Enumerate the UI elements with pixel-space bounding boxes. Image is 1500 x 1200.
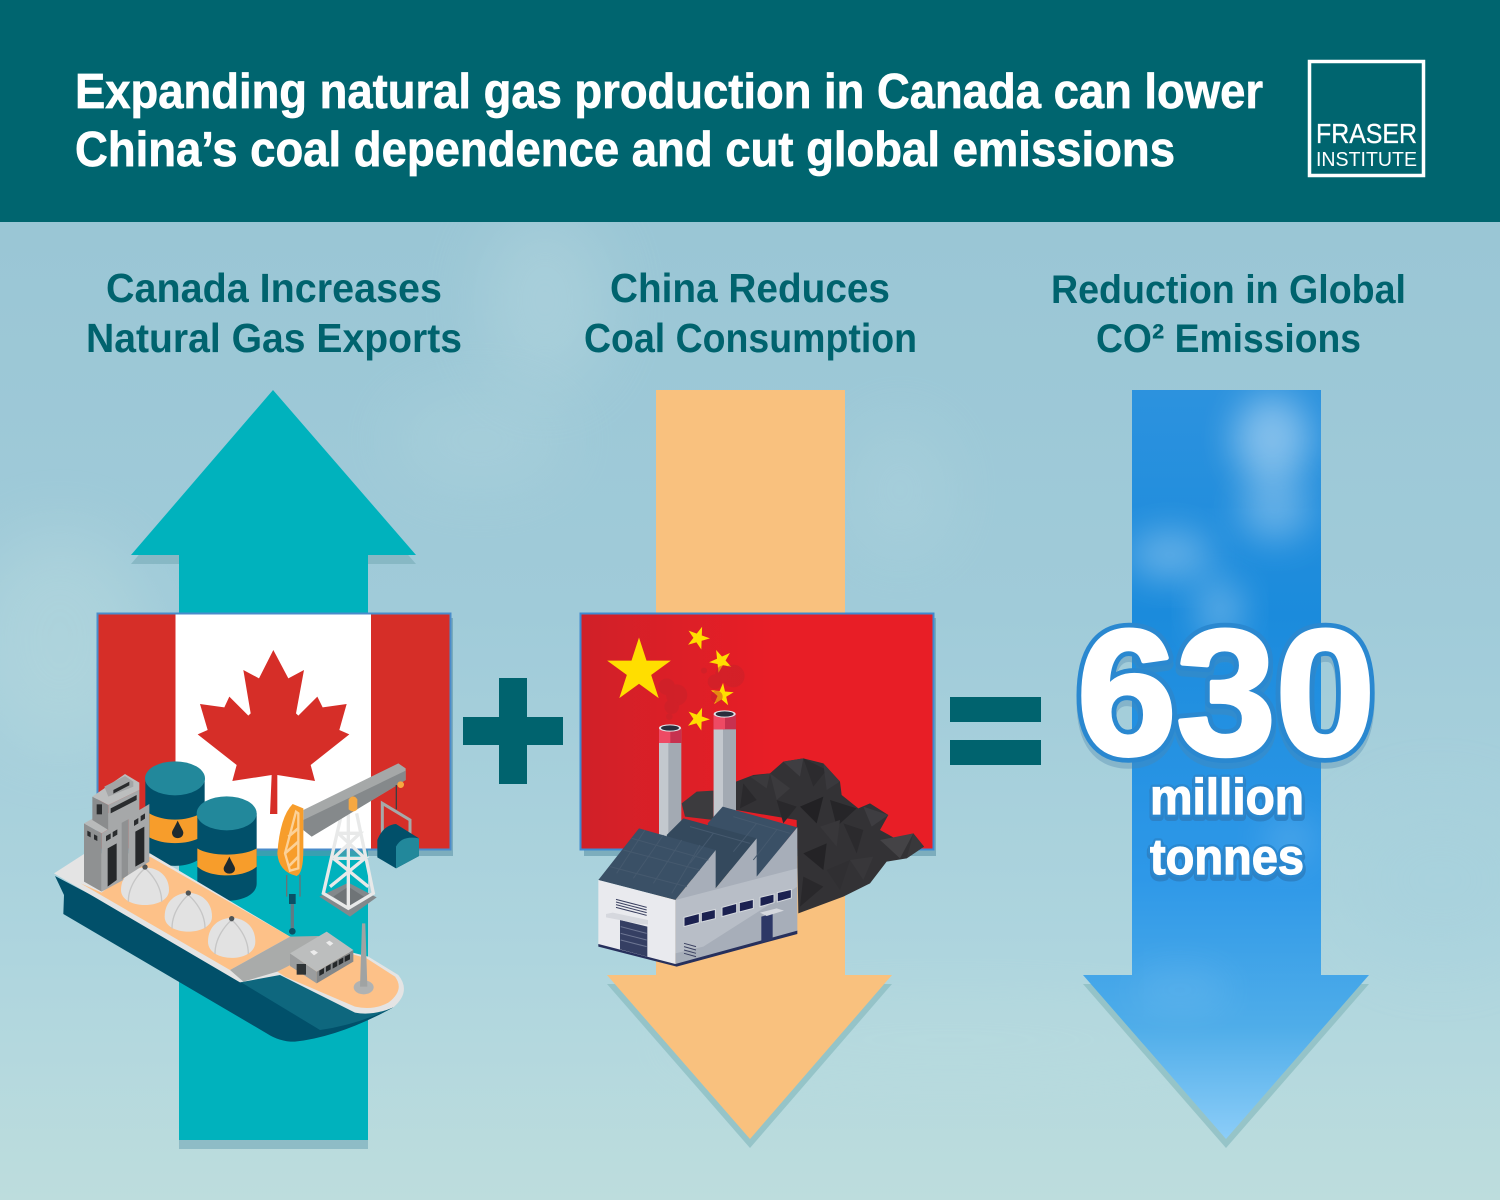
illustration: factory and coal: [598, 665, 924, 967]
ship hull: [55, 876, 393, 1042]
icon: chimneys: [659, 710, 736, 838]
title: Expanding natural gas production in Canada can lower: [75, 65, 1263, 119]
arrow down: orange: [607, 390, 892, 1148]
illustration: ship, barrels, oil pump: [54, 761, 419, 1042]
icon: coal pile: [682, 758, 924, 913]
heading: CO2 reduction: CO² Emissions: [1096, 317, 1361, 361]
ship cabin and mast: [290, 923, 374, 994]
number 630: 630: [1077, 593, 1375, 792]
heading: CO2 reduction: Reduction in Global: [1051, 268, 1406, 312]
logo: Fraser Institute: [1310, 62, 1424, 176]
arrow down: blue sky: [1083, 390, 1369, 1148]
heading: Canada: Canada Increases: [106, 265, 442, 311]
number 630: 630: [1077, 599, 1375, 798]
icon: oil barrels: [145, 761, 257, 901]
title: [75, 65, 1263, 177]
label million: million: [1150, 772, 1304, 828]
icon: factory: [598, 807, 797, 967]
icon: maple leaf: [198, 650, 349, 814]
label tonnes: tonnes: [1150, 829, 1304, 885]
heading: CO2 reduction: [1051, 268, 1406, 361]
big number: 630 million tonnes: [1077, 593, 1375, 888]
arrow up: teal: [131, 390, 416, 1149]
heading: Canada: [86, 265, 462, 361]
label million: million: [1150, 769, 1304, 825]
label million: million: [1150, 769, 1304, 825]
heading: China: China Reduces: [610, 265, 890, 311]
ship bridge building: [84, 774, 149, 892]
logo: Fraser Institute: FRASER: [1316, 118, 1417, 149]
label tonnes: tonnes: [1150, 832, 1304, 888]
factory windows: [684, 889, 791, 927]
heading: China: Coal Consumption: [584, 315, 917, 361]
logo: Fraser Institute: INSTITUTE: [1316, 148, 1417, 171]
ship tanks: [121, 867, 255, 958]
heading: Canada: Natural Gas Exports: [86, 315, 462, 361]
title: China’s coal dependence and cut global emissions: [75, 123, 1175, 177]
number 630: 630: [1077, 593, 1375, 792]
icon: small stars: [684, 623, 738, 732]
ship deck: [54, 853, 404, 1014]
equals sign: [950, 697, 1041, 765]
icon: large star: [607, 638, 671, 698]
icon: oil pumpjack: [277, 763, 419, 935]
heading: China: [584, 265, 917, 361]
header band: [0, 0, 1500, 222]
smoke: [658, 665, 745, 720]
label tonnes: tonnes: [1150, 829, 1304, 885]
plus sign: [463, 678, 563, 784]
flag: Canada: [98, 614, 453, 856]
flag: China: [580, 614, 936, 856]
